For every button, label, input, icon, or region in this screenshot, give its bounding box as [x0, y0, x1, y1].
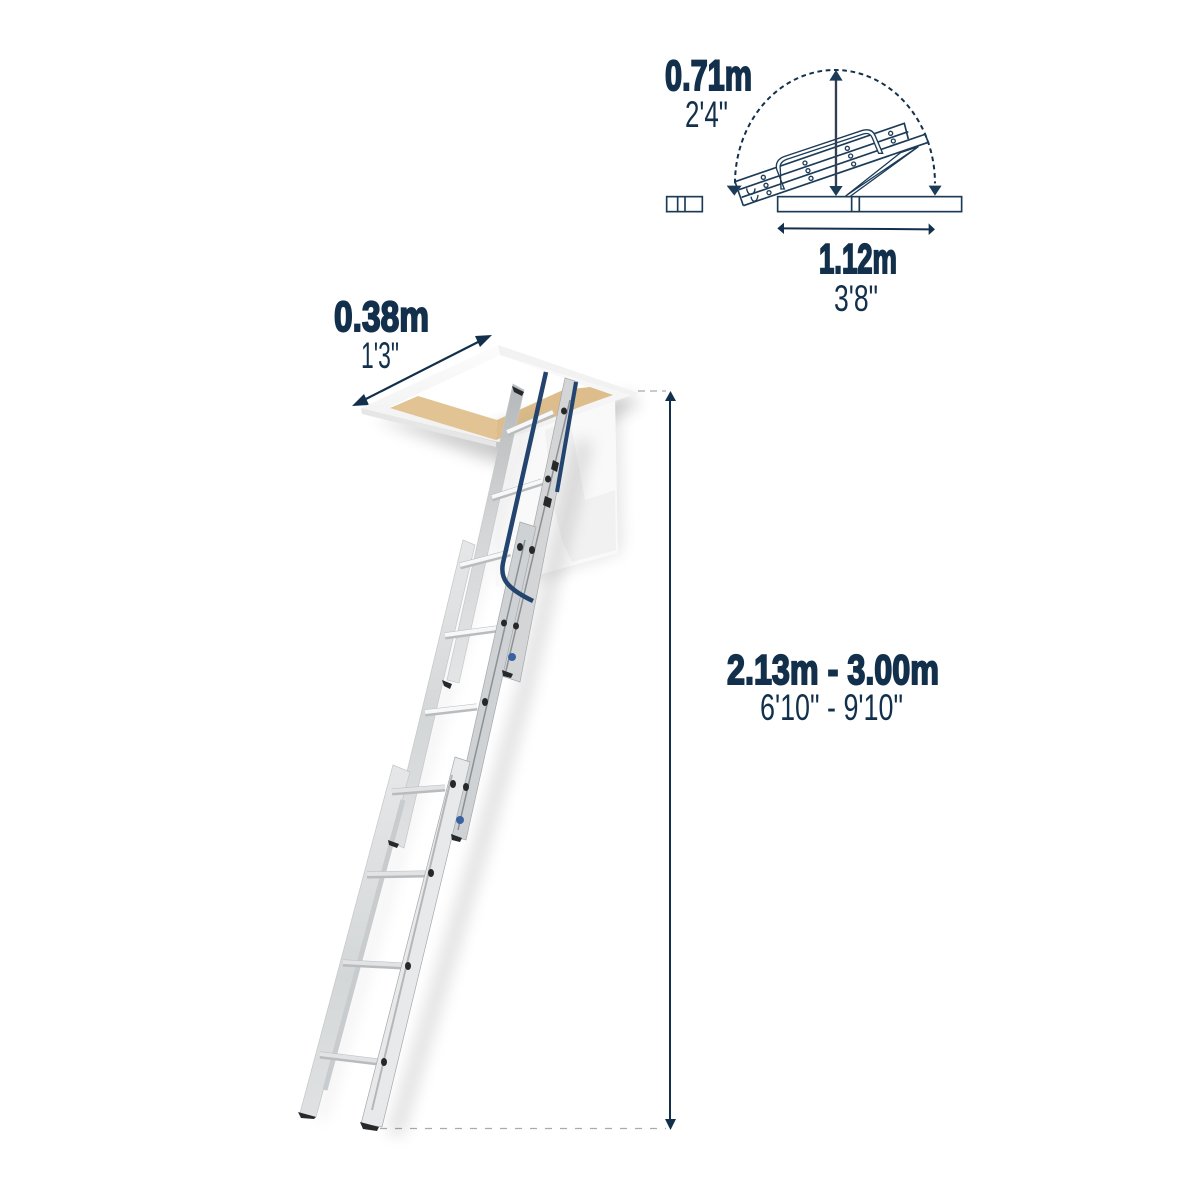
label 0.71m: 2'4": [685, 94, 728, 135]
folding clearance diagram: [667, 70, 962, 235]
dashed swing arc: [735, 70, 935, 183]
label 0.38m: 1'3": [361, 335, 399, 376]
folded ladder holes: [761, 131, 895, 195]
label height range: [727, 646, 939, 728]
width arrow: [777, 223, 935, 235]
label 0.38m: [334, 293, 429, 376]
swing arrowheads: [727, 186, 942, 196]
height arrow: [829, 70, 843, 196]
right rails: [361, 378, 578, 1127]
width dimension arrow: [352, 335, 492, 406]
label 1.12m: 3'8": [834, 278, 878, 319]
label 0.71m: 0.71m: [665, 52, 752, 100]
label 1.12m: [819, 235, 897, 319]
label height range: 2.13m - 3.00m: [727, 646, 939, 693]
attic hatch: [361, 345, 640, 590]
hatch door panel: [496, 387, 622, 590]
height dimension arrow: [380, 391, 676, 1130]
label 1.12m: 1.12m: [819, 235, 897, 282]
ladder: [298, 372, 578, 1131]
black rung pins: [381, 408, 567, 1066]
hatch shadow: [372, 395, 640, 462]
ladder feet: [298, 386, 524, 1131]
blue locking clamps: [456, 653, 516, 824]
ceiling boards: [667, 197, 962, 212]
blue handrail: [502, 372, 546, 601]
left rails: [300, 384, 524, 1117]
hatch strut: [846, 147, 918, 196]
label height range: 6'10" - 9'10": [760, 687, 903, 728]
folded handrail: [776, 130, 883, 189]
label 0.38m: 0.38m: [334, 293, 429, 341]
ladder shadow: [320, 410, 585, 1135]
rungs: [320, 412, 553, 1062]
folded ladder: [735, 123, 928, 206]
timber joists: [390, 387, 613, 440]
upper blue stile: [557, 382, 576, 492]
hatch frame: [361, 345, 638, 442]
label 0.71m: [665, 52, 752, 135]
